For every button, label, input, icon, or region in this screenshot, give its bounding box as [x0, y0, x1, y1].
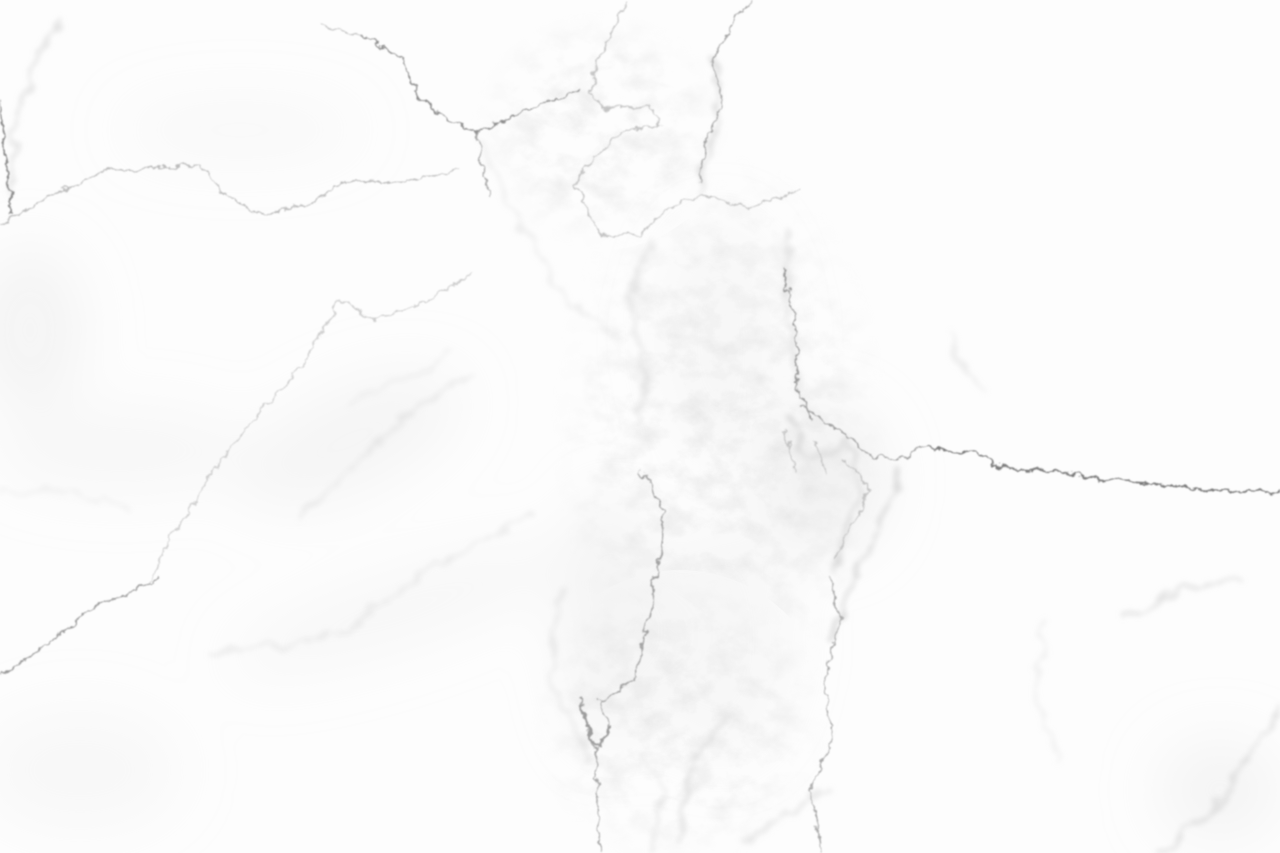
vein: central vertical — [783, 270, 812, 420]
vein: centre descent — [580, 470, 665, 750]
vein: upper centre network — [575, 5, 800, 235]
vein: left edge — [0, 100, 12, 215]
vein: upper left — [0, 165, 460, 225]
vein: right junction — [800, 405, 925, 458]
vein: top arc start — [320, 25, 360, 35]
vein: lower left — [0, 578, 160, 675]
vein: top right branch — [700, 0, 750, 180]
vein: long diagonal left — [150, 275, 470, 582]
vein: top arc — [360, 35, 582, 133]
vein: lower right descent — [810, 580, 840, 853]
vein: junction drop — [478, 133, 490, 195]
vein: pooled dark section — [582, 705, 610, 748]
mottled central texture — [516, 55, 845, 818]
vein: right horizontal — [925, 447, 1280, 492]
vein: junction cluster — [785, 430, 870, 560]
vein: lower descent — [595, 750, 600, 853]
